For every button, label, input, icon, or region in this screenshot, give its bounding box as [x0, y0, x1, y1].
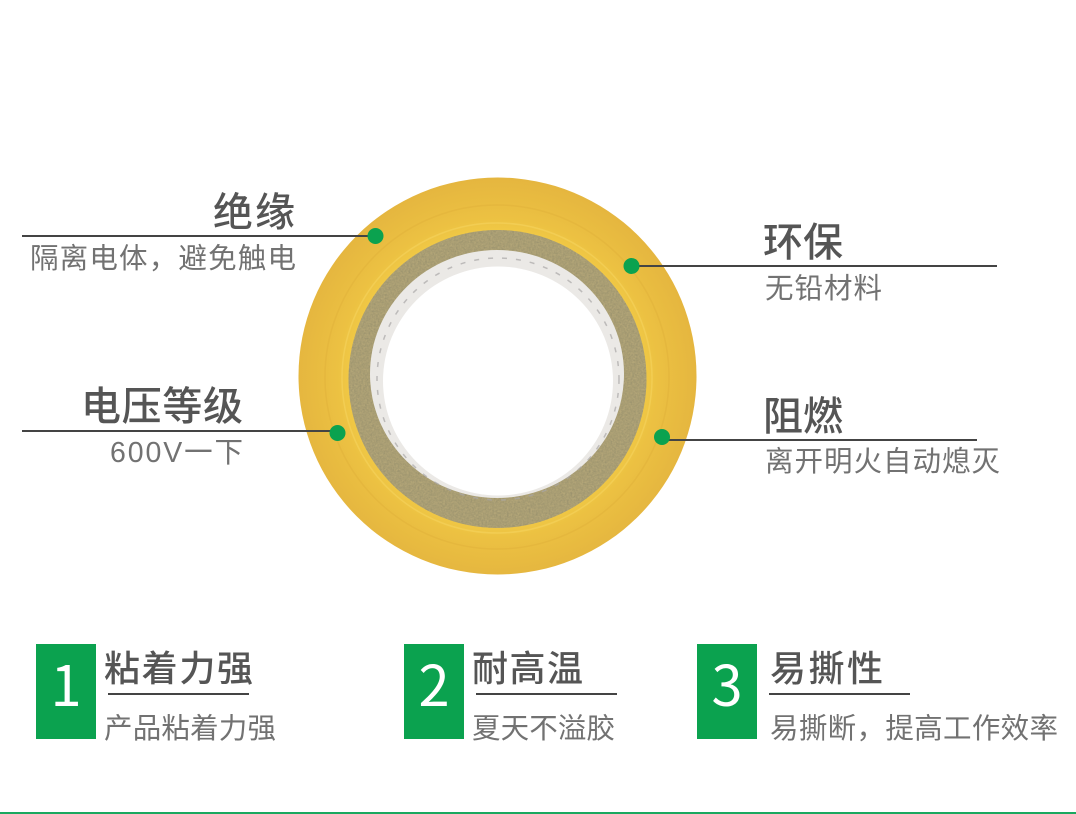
number badge: 1 [50, 642, 82, 723]
number badge [36, 642, 96, 739]
heading: 电压等级 [81, 385, 243, 429]
description: 易撕断，提高工作效率 [770, 713, 1058, 745]
description: 离开明火自动熄灭 [765, 446, 1000, 478]
feature 1 [36, 642, 276, 745]
heading: 耐高温 [472, 648, 583, 689]
heading: 环保 [763, 221, 843, 265]
marker [368, 228, 384, 244]
bottom green rule [0, 812, 1076, 814]
feature 3 [697, 642, 1058, 745]
callout: 绝缘 [22, 191, 384, 275]
leader line [664, 439, 977, 441]
leader line [634, 265, 997, 267]
lining print marks [377, 258, 619, 500]
heading: 易撕性 [770, 648, 883, 689]
tape outer [298, 178, 696, 574]
divider [476, 693, 617, 695]
tape roll [298, 178, 696, 574]
callout: 电压等级 [22, 385, 346, 469]
tape winding rings [325, 205, 669, 549]
number badge [697, 642, 757, 739]
marker [654, 429, 670, 445]
description: 产品粘着力强 [104, 713, 276, 745]
callout: 环保 [624, 221, 997, 305]
description: 600V一下 [110, 437, 243, 469]
number badge: 2 [418, 642, 450, 723]
divider [108, 693, 249, 695]
divider [769, 693, 910, 695]
description: 夏天不溢胶 [472, 713, 615, 745]
center hole [383, 266, 613, 496]
heading: 粘着力强 [104, 648, 253, 689]
heading: 阻燃 [763, 395, 843, 439]
number badge: 3 [711, 642, 743, 723]
leader line [22, 430, 336, 432]
description: 隔离电体，避免触电 [30, 243, 296, 275]
marker [624, 258, 640, 274]
marker [330, 425, 346, 441]
heading: 绝缘 [213, 191, 295, 235]
description: 无铅材料 [765, 273, 882, 305]
white inner lining [370, 250, 624, 498]
number badge [404, 642, 464, 739]
leader line [22, 235, 372, 237]
feature 2 [404, 642, 617, 745]
cardboard core [348, 230, 646, 528]
callout: 阻燃 [654, 395, 1000, 478]
